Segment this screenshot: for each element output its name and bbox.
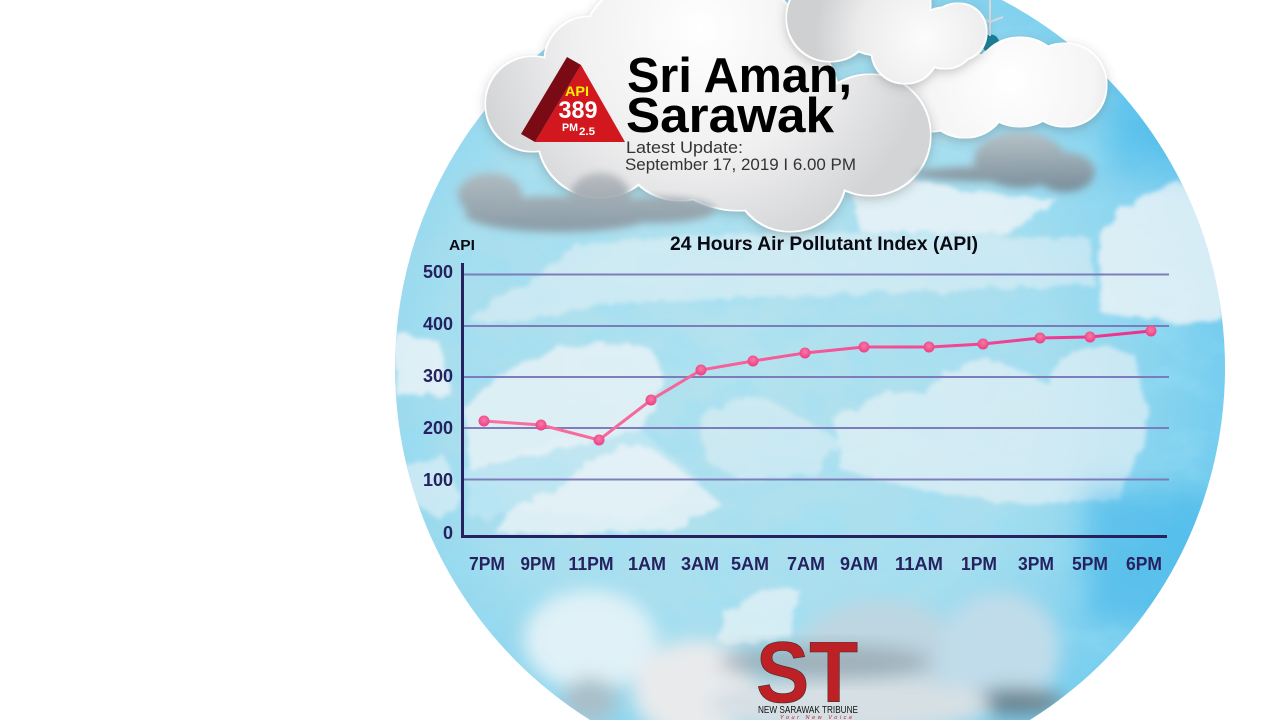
x axis labels [469,554,1162,574]
x axis labels: 9AM [840,554,878,574]
x axis labels: 11PM [568,554,614,574]
balloon string [982,0,1003,36]
cloud: overlapping grey cloud [787,0,986,83]
title: Sarawak [626,89,835,143]
y axis labels [423,262,453,543]
blue balloon right [984,34,999,51]
x axis labels: 1AM [628,554,666,574]
line chart [423,237,1169,574]
infographic canvas [395,0,1225,720]
badge pollutant subscript: 2.5 [579,126,595,138]
panel: watercolour sky disc [390,0,1230,720]
update text: September 17, 2019 I 6.00 PM [625,155,856,174]
x axis labels: 7PM [469,554,505,574]
y axis labels: 400 [423,314,453,334]
data line [484,331,1151,440]
y axis labels: 100 [423,470,453,490]
y axis title: API [449,237,475,254]
axes [462,263,1167,536]
cloud: main title cloud [486,0,930,231]
x axis labels: 3AM [681,554,719,574]
update text: Latest Update: [626,138,743,157]
x axis labels: 9PM [520,554,556,574]
API triangle badge [521,57,625,142]
x axis labels: 3PM [1018,554,1054,574]
badge pollutant: PM [562,122,578,134]
logo letters: ST [756,625,858,720]
logo name: NEW SARAWAK TRIBUNE [758,705,858,716]
y axis labels: 500 [423,262,453,282]
title: Sri Aman, [627,49,852,103]
x axis labels: 6PM [1126,554,1162,574]
badge value: 389 [558,97,598,124]
dark cloud right [915,132,1095,192]
y axis labels: 200 [423,418,453,438]
x axis labels: 5PM [1072,554,1108,574]
blue balloon top [669,0,691,3]
update text [625,138,856,174]
x axis labels: 1PM [961,554,997,574]
title [626,49,852,143]
bottom soft clouds [524,590,1065,720]
badge label API: API [565,83,589,99]
background watercolour clouds [395,178,1225,645]
y axis labels: 300 [423,366,453,386]
triangle red face [535,65,625,142]
logo: New Sarawak Tribune [756,625,858,720]
logo backdrop shadow cloud [720,645,930,679]
data points [478,326,1156,446]
triangle dark side [521,57,581,142]
dark cloud left [458,173,715,232]
x axis labels: 7AM [787,554,825,574]
x axis labels: 5AM [731,554,769,574]
chart title: 24 Hours Air Pollutant Index (API) [670,234,978,255]
cloud: right white cloud [887,38,1106,137]
x axis labels: 11AM [895,554,943,574]
y axis labels: 0 [443,523,453,543]
